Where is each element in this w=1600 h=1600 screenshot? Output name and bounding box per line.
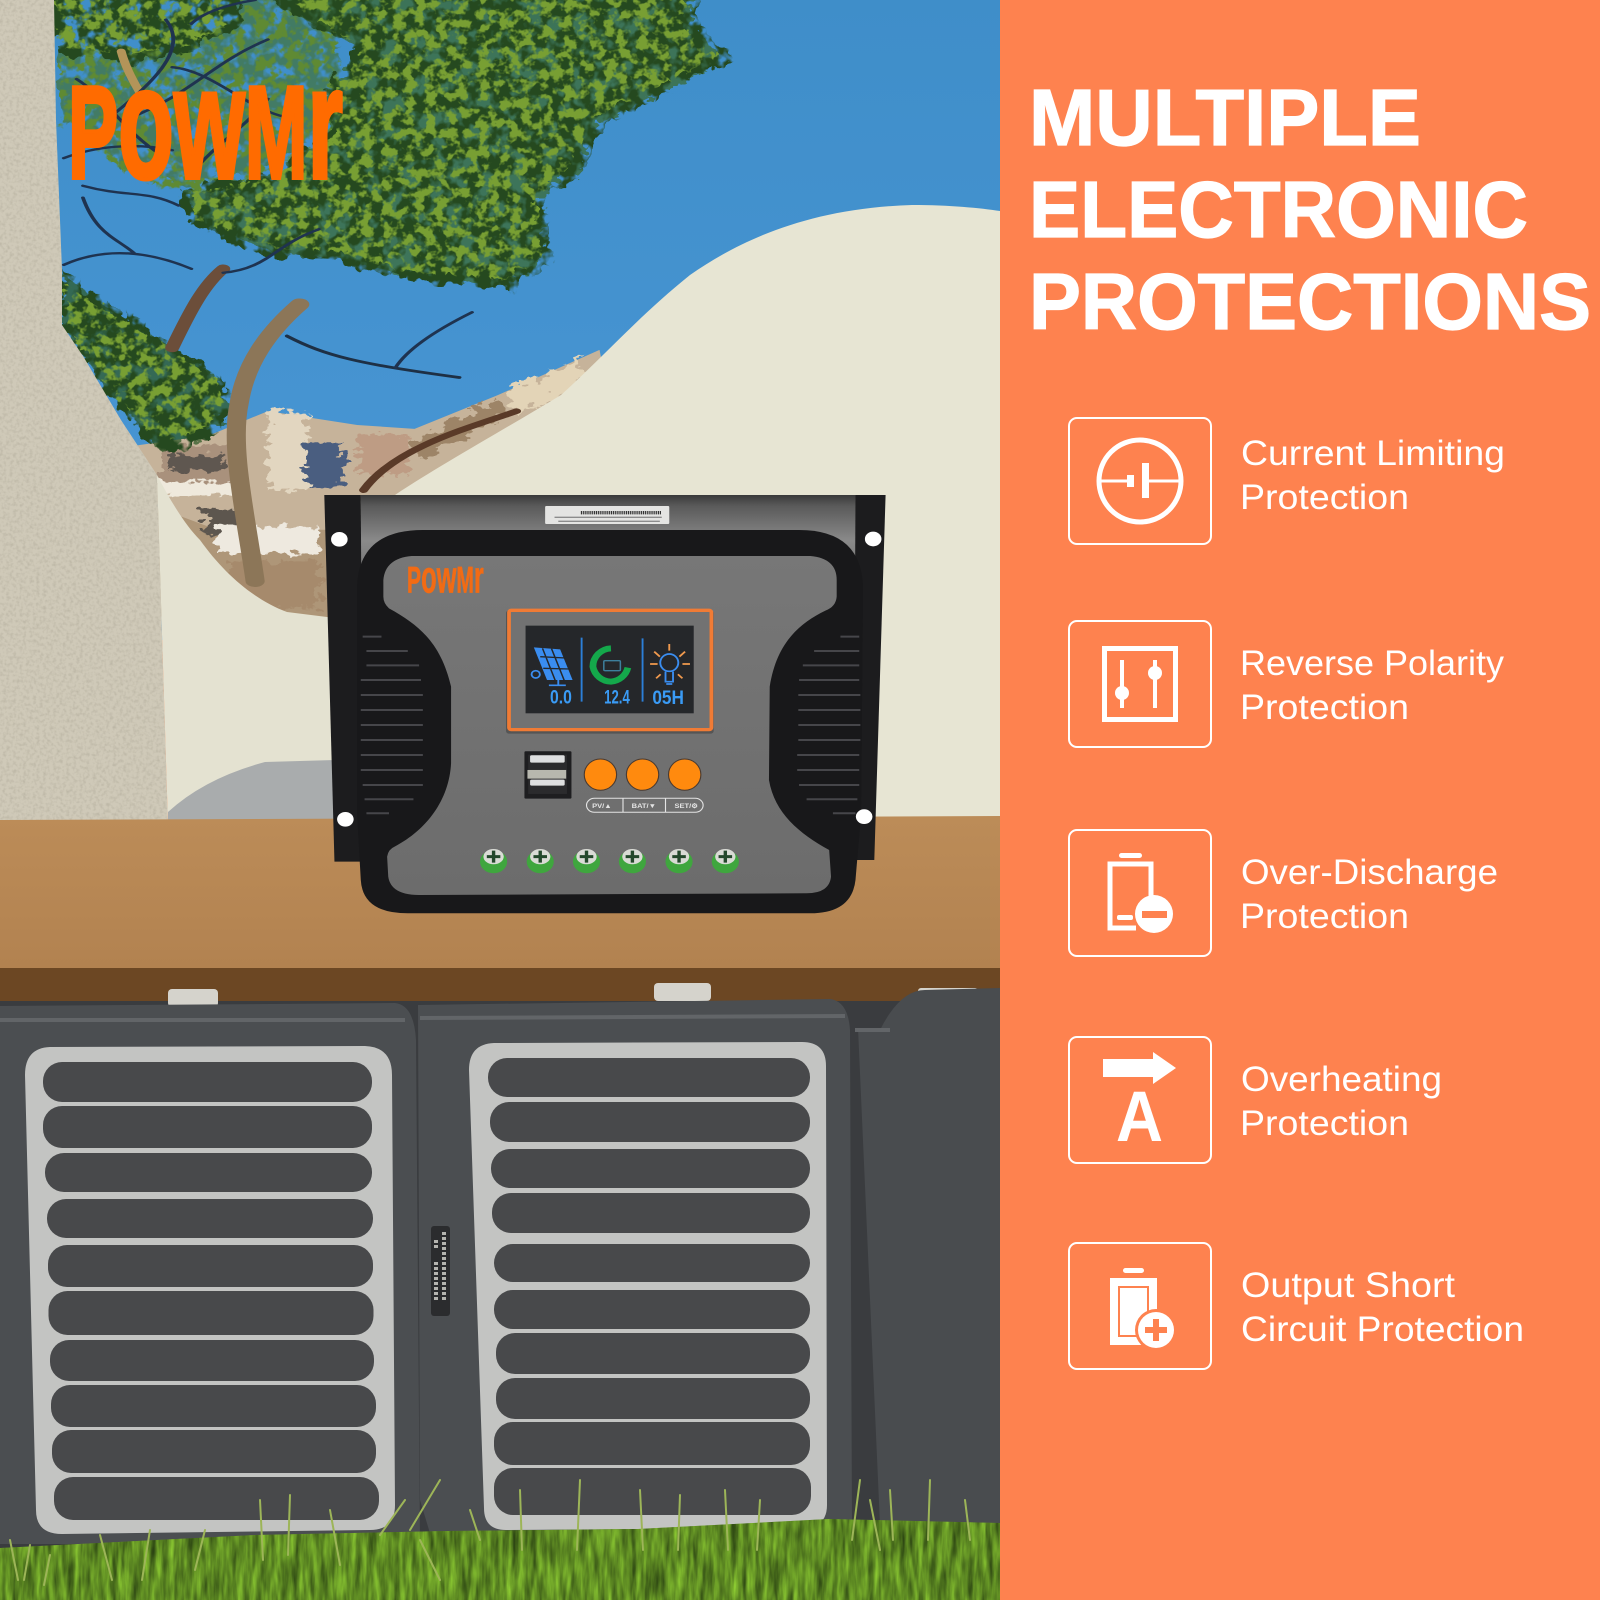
- item: reverse polarity: [1069, 621, 1505, 747]
- sparse foliage on left of the tree: [54, 0, 344, 186]
- text: output short circuit: Circuit Protection: [1241, 1310, 1524, 1349]
- button labels: SET/⚙: [675, 802, 698, 810]
- gray face: [383, 556, 837, 895]
- tree foliage dark layer: [54, 0, 733, 455]
- vents: [361, 637, 860, 813]
- canopy shade: [62, 0, 724, 451]
- text: overheating: Protection: [1240, 1104, 1409, 1143]
- table top: [0, 816, 1000, 970]
- icon: battery plus: [1110, 1268, 1177, 1351]
- middle tank: [418, 999, 852, 1540]
- text: over-discharge: Protection: [1240, 897, 1409, 936]
- sky: [0, 0, 1000, 640]
- title: ELECTRONIC: [1029, 165, 1528, 254]
- left wall: [0, 0, 168, 825]
- screen: solar panel icon: [532, 647, 573, 685]
- text: current limiting: Protection: [1240, 478, 1409, 517]
- tree and distant town: [54, 0, 733, 620]
- left frame and slats: [25, 1046, 395, 1534]
- display: [506, 610, 714, 734]
- mounting plate: [324, 495, 886, 862]
- icon: arrow over A: [1103, 1052, 1176, 1157]
- USB ports: [524, 751, 571, 799]
- text: overheating: Overheating: [1241, 1060, 1442, 1099]
- button labels: PV/▲: [592, 802, 612, 810]
- screen readings: [550, 686, 684, 709]
- button labels: [587, 798, 703, 812]
- terminal screws: [480, 849, 739, 873]
- tank caps: [168, 983, 978, 1007]
- lower ivory wall: [157, 475, 335, 825]
- icon: current limiter circle: [1099, 440, 1181, 522]
- text: current limiting: Current Limiting: [1241, 434, 1505, 473]
- text: current limiting: [1240, 434, 1505, 517]
- sparse light foliage on left of the tree: [54, 0, 344, 198]
- device logo: PowMr: [407, 552, 484, 603]
- item: output short circuit: [1069, 1243, 1524, 1369]
- middle frame and slats: [469, 1042, 827, 1530]
- control buttons: [584, 759, 701, 790]
- right tank: [858, 988, 1000, 1530]
- text: over-discharge: Over-Discharge: [1241, 853, 1498, 892]
- screen: battery ring: [593, 648, 628, 682]
- text: overheating: [1240, 1060, 1442, 1143]
- title: MULTIPLE: [1029, 73, 1421, 162]
- panel: orange protections: [1000, 0, 1600, 1600]
- button labels: BAT/▼: [632, 802, 656, 810]
- screen readings: 0.0: [550, 686, 572, 708]
- screen readings: 05H: [652, 687, 684, 709]
- item: over-discharge: [1069, 830, 1498, 956]
- icon: arrow over A: A: [1116, 1078, 1163, 1157]
- left tank: [0, 1003, 420, 1544]
- spec label: [545, 506, 669, 524]
- text: output short circuit: [1241, 1266, 1524, 1349]
- table front edge: [0, 968, 1000, 1002]
- tree trunk and branches: [64, 0, 517, 581]
- icon: battery minus: [1110, 853, 1173, 933]
- tree foliage light layer: [54, 0, 714, 443]
- item: current limiting: [1069, 418, 1505, 544]
- panel: solar tanks: [0, 983, 1000, 1561]
- panel: grass: [0, 1480, 1000, 1600]
- icon: sliders: [1104, 648, 1176, 720]
- right dome wall: [335, 205, 1000, 825]
- text: reverse polarity: Reverse Polarity: [1240, 644, 1505, 683]
- item: overheating: [1069, 1037, 1442, 1163]
- screen: bulb icon: [650, 644, 690, 684]
- mounting holes: [331, 532, 881, 827]
- panel: photo background: [0, 0, 1000, 1002]
- title: PROTECTIONS: [1029, 257, 1591, 346]
- product: solar charge controller: [324, 495, 886, 913]
- text: reverse polarity: [1240, 644, 1505, 727]
- text: reverse polarity: Protection: [1240, 688, 1409, 727]
- distant buildings: [128, 350, 612, 620]
- text: over-discharge: [1240, 853, 1498, 936]
- text: output short circuit: Output Short: [1241, 1266, 1455, 1305]
- title: [1029, 73, 1591, 346]
- wall shadow: [168, 760, 335, 825]
- black housing: [357, 530, 863, 913]
- screen readings: 12.4: [604, 686, 630, 708]
- logo: PowMr brand: PowMr: [68, 33, 343, 212]
- tank tag: [431, 1226, 450, 1316]
